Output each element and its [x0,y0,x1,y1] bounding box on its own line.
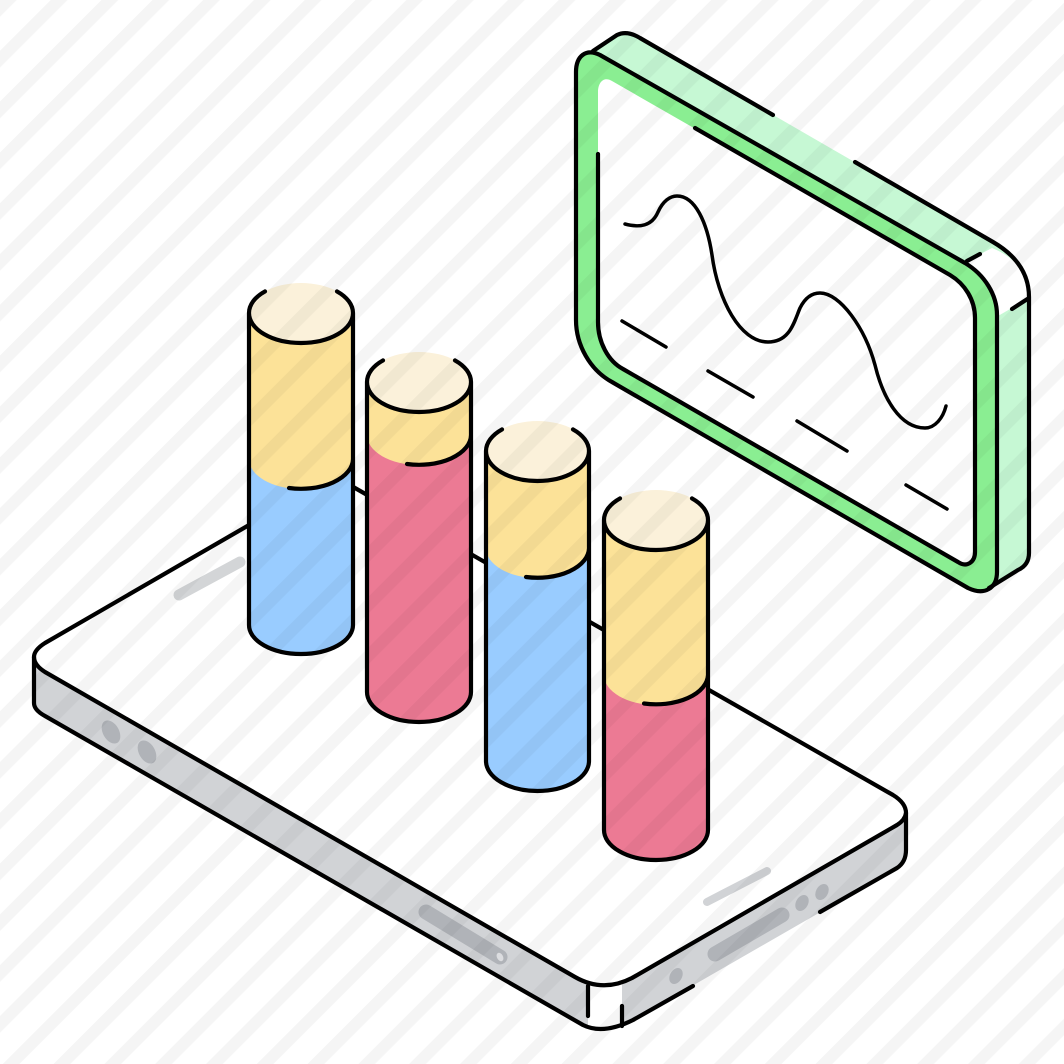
left side buttons [98,717,160,767]
screen inner outline [598,128,975,564]
phone bottom corner highlight [588,980,622,1030]
phone [34,480,906,1030]
screen glare left [179,562,240,595]
right side speaker slot [715,915,782,954]
phone corner ticks [588,986,622,1026]
chart axis dashes [622,321,947,509]
bar 1: yellow over blue [249,283,353,654]
monitor screen [598,79,975,564]
monitor corner highlight [965,248,1029,316]
phone side walls [34,657,906,1029]
monitor [576,33,1029,591]
right side ports [667,882,831,986]
bar 3: yellow over blue [486,421,589,791]
bar 4: yellow over red [604,490,708,860]
screen glare right [707,871,767,902]
left side speaker slot [426,912,505,962]
monitor back depth [593,33,1029,590]
phone side outline [34,657,906,1029]
monitor back outline [593,33,1029,588]
monitor front frame [576,52,997,591]
line chart curve [625,196,946,428]
phone top face [34,480,906,985]
bar 2: yellow over red [367,352,471,722]
